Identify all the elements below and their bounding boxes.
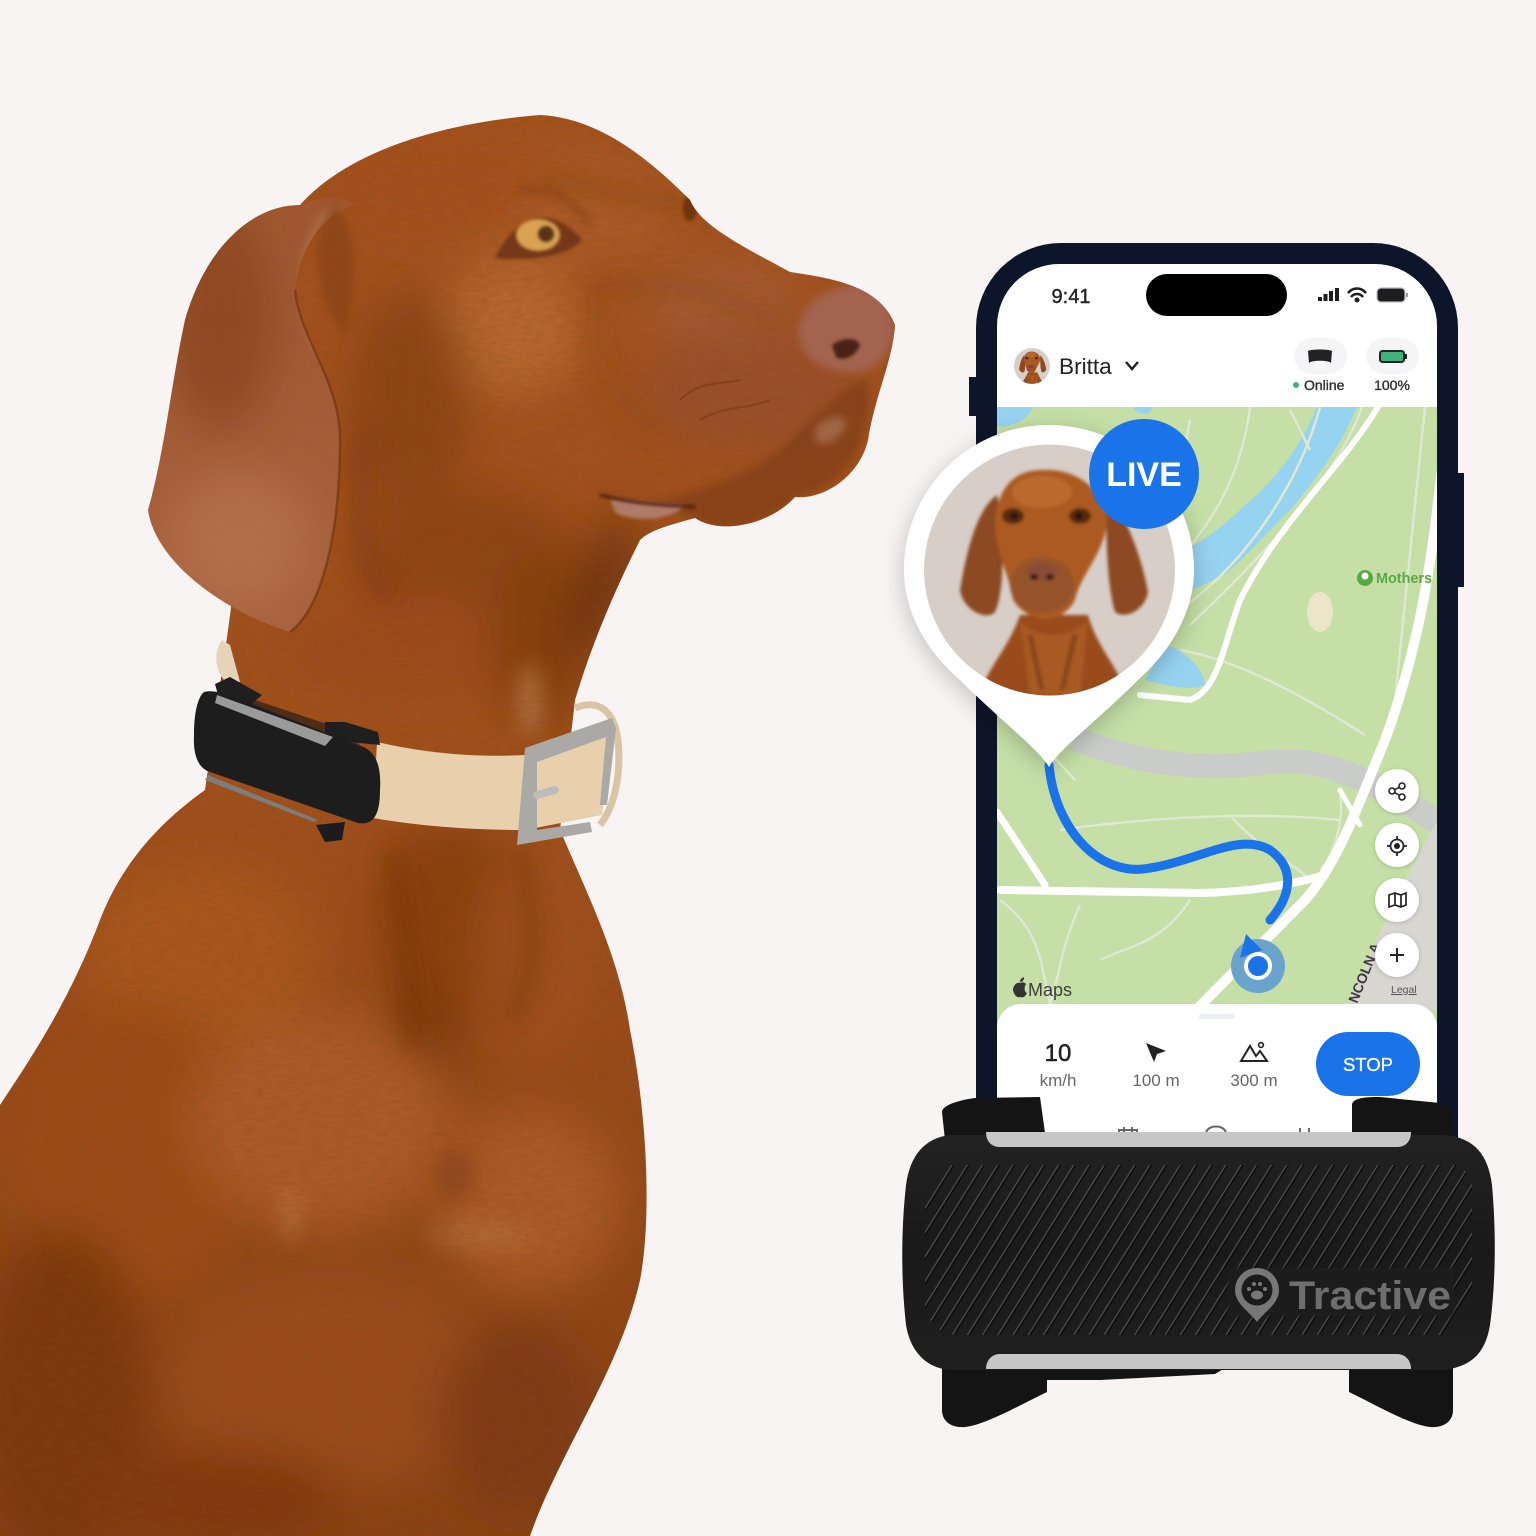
street label: NCOLN A — [1345, 940, 1383, 1005]
speed stat: 10 — [1045, 1040, 1071, 1067]
tracker status pill — [1293, 338, 1347, 393]
fur texture — [0, 100, 900, 1536]
bottom clamps — [942, 1365, 1453, 1427]
signal bars — [1318, 288, 1339, 301]
altitude stat: 300 m — [1230, 1071, 1278, 1090]
chevron — [1126, 362, 1138, 369]
thin paths — [1000, 407, 1425, 1004]
current location marker — [1231, 934, 1285, 993]
phone screen — [997, 264, 1445, 1144]
tracker on collar — [194, 677, 380, 842]
live pet location pin — [904, 419, 1199, 767]
map button: share — [1375, 769, 1419, 813]
battery status pill — [1366, 338, 1419, 393]
map button: locate — [1375, 823, 1419, 867]
stop button: STOP — [1343, 1054, 1393, 1075]
white roads — [997, 407, 1445, 1006]
pet header: Britta — [1059, 354, 1112, 379]
bottom light strip — [986, 1354, 1411, 1369]
bottom sheet — [997, 1004, 1437, 1135]
phone frame — [976, 243, 1458, 1140]
pet header — [1014, 338, 1419, 393]
LIVE badge: LIVE — [1106, 456, 1182, 494]
collar strap — [216, 640, 619, 845]
dynamic island — [1146, 274, 1287, 316]
map — [997, 407, 1445, 1027]
speed stat: km/h — [1040, 1071, 1076, 1090]
tracker status pill: Online — [1304, 377, 1345, 393]
legal link: Legal — [1391, 984, 1417, 996]
altitude stat — [1230, 1043, 1278, 1090]
top light strip — [986, 1132, 1411, 1147]
Apple Maps label — [1013, 977, 1072, 1000]
status bar: 9:41 — [1052, 286, 1090, 308]
phone side buttons — [969, 377, 1464, 587]
map button: layers — [1375, 878, 1419, 922]
buckle — [517, 718, 616, 845]
Apple Maps label: Maps — [1028, 980, 1072, 1000]
tab bar icons peeking — [1119, 1126, 1309, 1134]
eye — [495, 189, 697, 259]
phone — [969, 243, 1464, 1144]
device body — [902, 1135, 1495, 1370]
top clamps — [942, 1097, 1454, 1140]
LIVE badge — [1089, 419, 1199, 529]
map button: zoom in — [1375, 933, 1419, 977]
place label: Mothers: Mothers — [1376, 571, 1432, 587]
muzzle and lips — [600, 380, 868, 528]
battery status pill: 100% — [1374, 377, 1410, 393]
Tractive GPS tracker device — [902, 1097, 1495, 1427]
speed stat — [1040, 1040, 1076, 1090]
pet avatar — [1014, 348, 1050, 385]
pin photo of dog — [924, 444, 1175, 705]
wifi icon — [1348, 288, 1366, 301]
battery icon — [1377, 288, 1408, 302]
Tractive logo — [1228, 1268, 1454, 1322]
ribbed texture — [920, 1160, 1476, 1340]
status bar — [1052, 274, 1408, 316]
grey motorway — [1075, 738, 1437, 822]
dog ear — [148, 198, 355, 632]
nose — [798, 285, 894, 372]
distance stat — [1132, 1043, 1180, 1090]
pin shape — [904, 425, 1194, 767]
grey road corner — [1345, 820, 1437, 1010]
Tractive logo: Tractive — [1289, 1274, 1451, 1318]
distance stat: 100 m — [1132, 1071, 1180, 1090]
route line — [1049, 765, 1288, 920]
water — [1192, 407, 1357, 590]
stop button — [1316, 1032, 1420, 1096]
